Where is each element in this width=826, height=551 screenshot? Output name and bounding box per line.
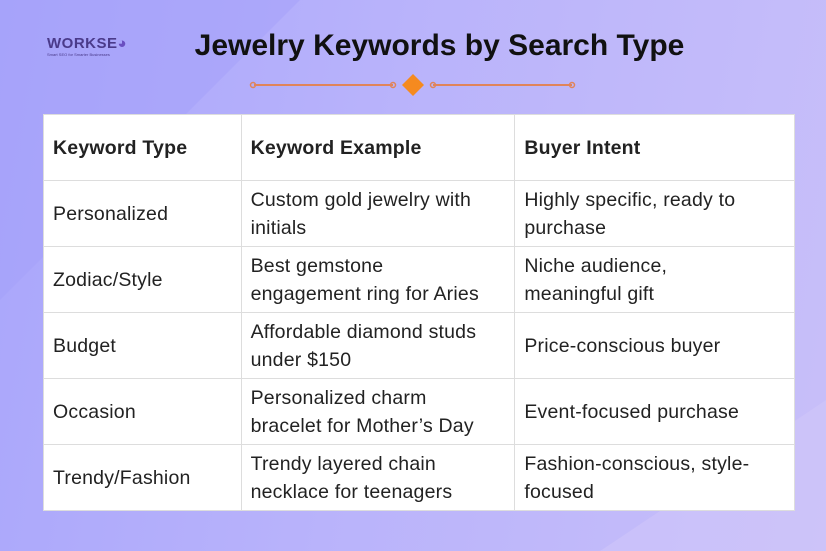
table: initials (251, 216, 306, 238)
table: engagement ring for Aries (251, 282, 479, 304)
table: Price-conscious buyer (524, 334, 720, 356)
table: meaningful gift (524, 282, 654, 304)
table: Keyword Type (53, 136, 187, 158)
table: under $150 (251, 348, 351, 370)
table: purchase (524, 216, 606, 238)
table: Buyer Intent (524, 136, 640, 158)
table: Best gemstone (251, 254, 383, 276)
logo: Smart SEO for Smarter Businesses (47, 52, 110, 57)
table: Trendy/Fashion (53, 466, 191, 488)
title: Jewelry Keywords by Search Type (195, 29, 684, 62)
table: Occasion (53, 400, 136, 422)
table: Niche audience, (524, 254, 667, 276)
table: Highly specific, ready to (524, 188, 735, 210)
table: Affordable diamond studs (251, 320, 476, 342)
table: bracelet for Mother’s Day (251, 414, 474, 436)
table: Custom gold jewelry with (251, 188, 471, 210)
table (43, 114, 795, 511)
divider with diamond (250, 74, 576, 96)
table: Zodiac/Style (53, 268, 163, 290)
table: necklace for teenagers (251, 480, 452, 502)
table: Event-focused purchase (524, 400, 739, 422)
table: Keyword Example (251, 136, 422, 158)
table: Fashion-conscious, style- (524, 452, 749, 474)
table: Personalized (53, 202, 168, 224)
table: Personalized charm (251, 386, 427, 408)
table: Trendy layered chain (251, 452, 436, 474)
logo: WORKSE◕ (47, 35, 127, 52)
table: Budget (53, 334, 116, 356)
table: focused (524, 480, 594, 502)
